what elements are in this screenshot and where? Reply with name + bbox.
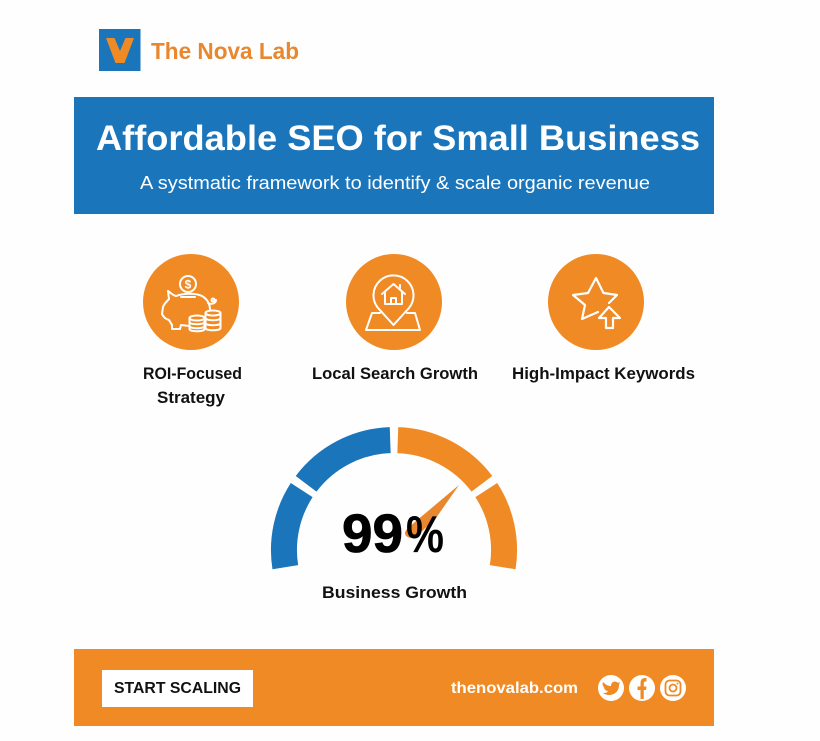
gauge label: Business Growth [322,583,467,602]
icon: facebook [629,675,655,701]
gauge value [342,504,444,564]
label: High-Impact Keywords: High-Impact Keywords [512,364,695,383]
subtitle: A systmatic framework to identify & scale organic revenue [140,173,650,193]
gauge: business growth [284,440,504,602]
button: start scaling [102,670,253,707]
header banner [74,97,714,214]
icon: twitter [598,675,624,701]
icon: instagram [660,675,686,701]
label: ROI-Focused Strategy: Strategy [157,389,226,407]
logo [99,29,299,71]
website: thenovalab.com [451,680,578,697]
icon: star with up arrow [548,254,644,350]
gauge arcs [284,440,504,567]
button: start scaling: START SCALING [114,680,241,697]
gauge value: % [406,506,444,564]
icon: piggy bank [143,254,239,350]
label: Local Search Growth: Local Search Growth [312,364,478,383]
label: ROI-Focused Strategy: ROI-Focused [143,364,242,383]
feature: high-impact keywords [512,254,695,383]
icon: piggy bank: $ [185,278,192,292]
gauge value: 99 [342,504,403,564]
feature: local search growth [312,254,478,383]
feature: ROI-focused strategy [143,254,242,407]
icon: map pin with house [346,254,442,350]
gauge needle [405,485,459,538]
footer bar [74,649,714,726]
label: ROI-Focused Strategy [143,364,242,407]
logo: The Nova Lab [151,38,299,64]
title: Affordable SEO for Small Business [96,119,700,158]
